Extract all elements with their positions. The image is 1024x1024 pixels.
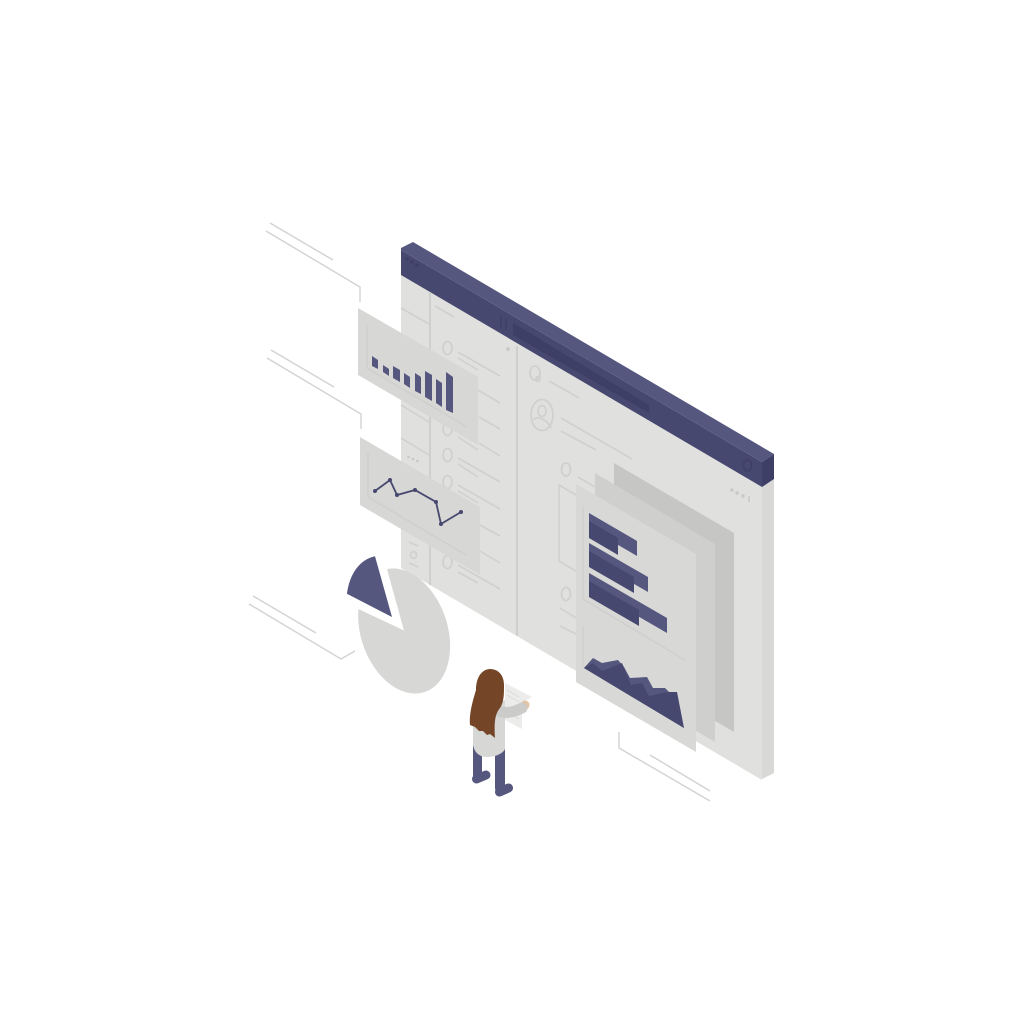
arm	[499, 708, 522, 712]
area chart	[584, 658, 684, 728]
body	[473, 700, 505, 757]
floating panel: line chart	[360, 437, 480, 575]
window side edge	[762, 473, 774, 779]
bars	[372, 356, 453, 413]
window body	[401, 275, 762, 780]
browser window	[401, 242, 774, 780]
person reading document	[470, 669, 532, 792]
hair	[470, 669, 504, 738]
middle sheet	[595, 473, 715, 742]
decorative line group: lower left	[249, 596, 355, 659]
floating panel: bar chart	[358, 308, 478, 445]
pie detached slice	[347, 547, 392, 617]
pie chart	[347, 547, 450, 707]
decorative line group: bottom right	[619, 732, 710, 801]
back sheet	[614, 463, 734, 732]
legs	[476, 745, 508, 792]
sheet axes	[583, 507, 685, 667]
document	[505, 683, 532, 729]
sidebar items	[401, 308, 429, 567]
decorative line group: middle left	[267, 350, 361, 429]
title bar	[401, 242, 774, 487]
pie main slice	[358, 555, 450, 707]
stacked report sheets	[576, 463, 734, 752]
front sheet	[576, 484, 696, 752]
middle column list	[435, 306, 510, 589]
line series	[373, 478, 463, 526]
hand	[520, 700, 530, 710]
decorative line group: top left	[266, 223, 360, 302]
horizontal bar chart	[589, 513, 667, 633]
right column profile and text	[530, 366, 749, 634]
column dividers	[430, 292, 517, 636]
